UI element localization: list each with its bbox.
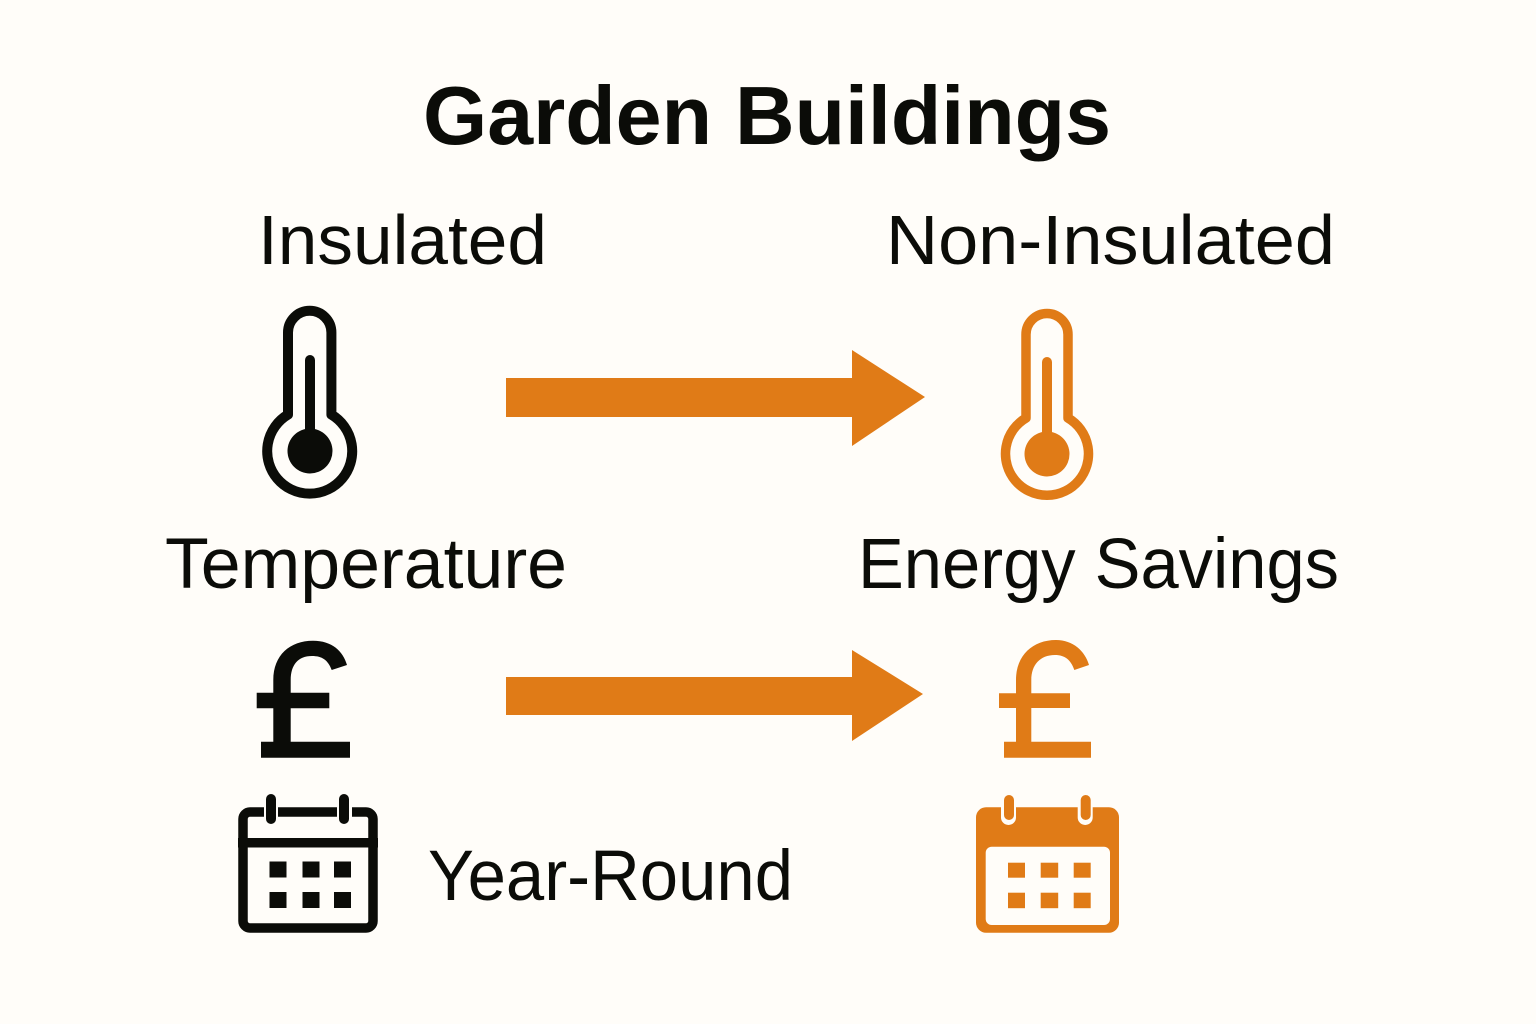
icon: black thermometer <box>267 311 352 494</box>
label: Temperature: Temperature <box>165 525 567 604</box>
icon: orange pound sign <box>999 640 1091 758</box>
icon: black pound sign <box>257 641 350 758</box>
label: Energy Savings: Energy Savings <box>858 525 1339 604</box>
icon: orange thermometer <box>1006 314 1088 495</box>
label: Year-Round: Year-Round <box>428 837 793 916</box>
arrow: energy savings <box>506 650 923 741</box>
heading: Insulated: Insulated <box>258 201 547 279</box>
arrow: temperature <box>506 350 925 446</box>
heading: Non-Insulated: Non-Insulated <box>886 201 1335 279</box>
icon: black calendar <box>238 794 378 928</box>
icon: orange calendar <box>976 795 1119 933</box>
title: Garden Buildings <box>423 69 1111 162</box>
